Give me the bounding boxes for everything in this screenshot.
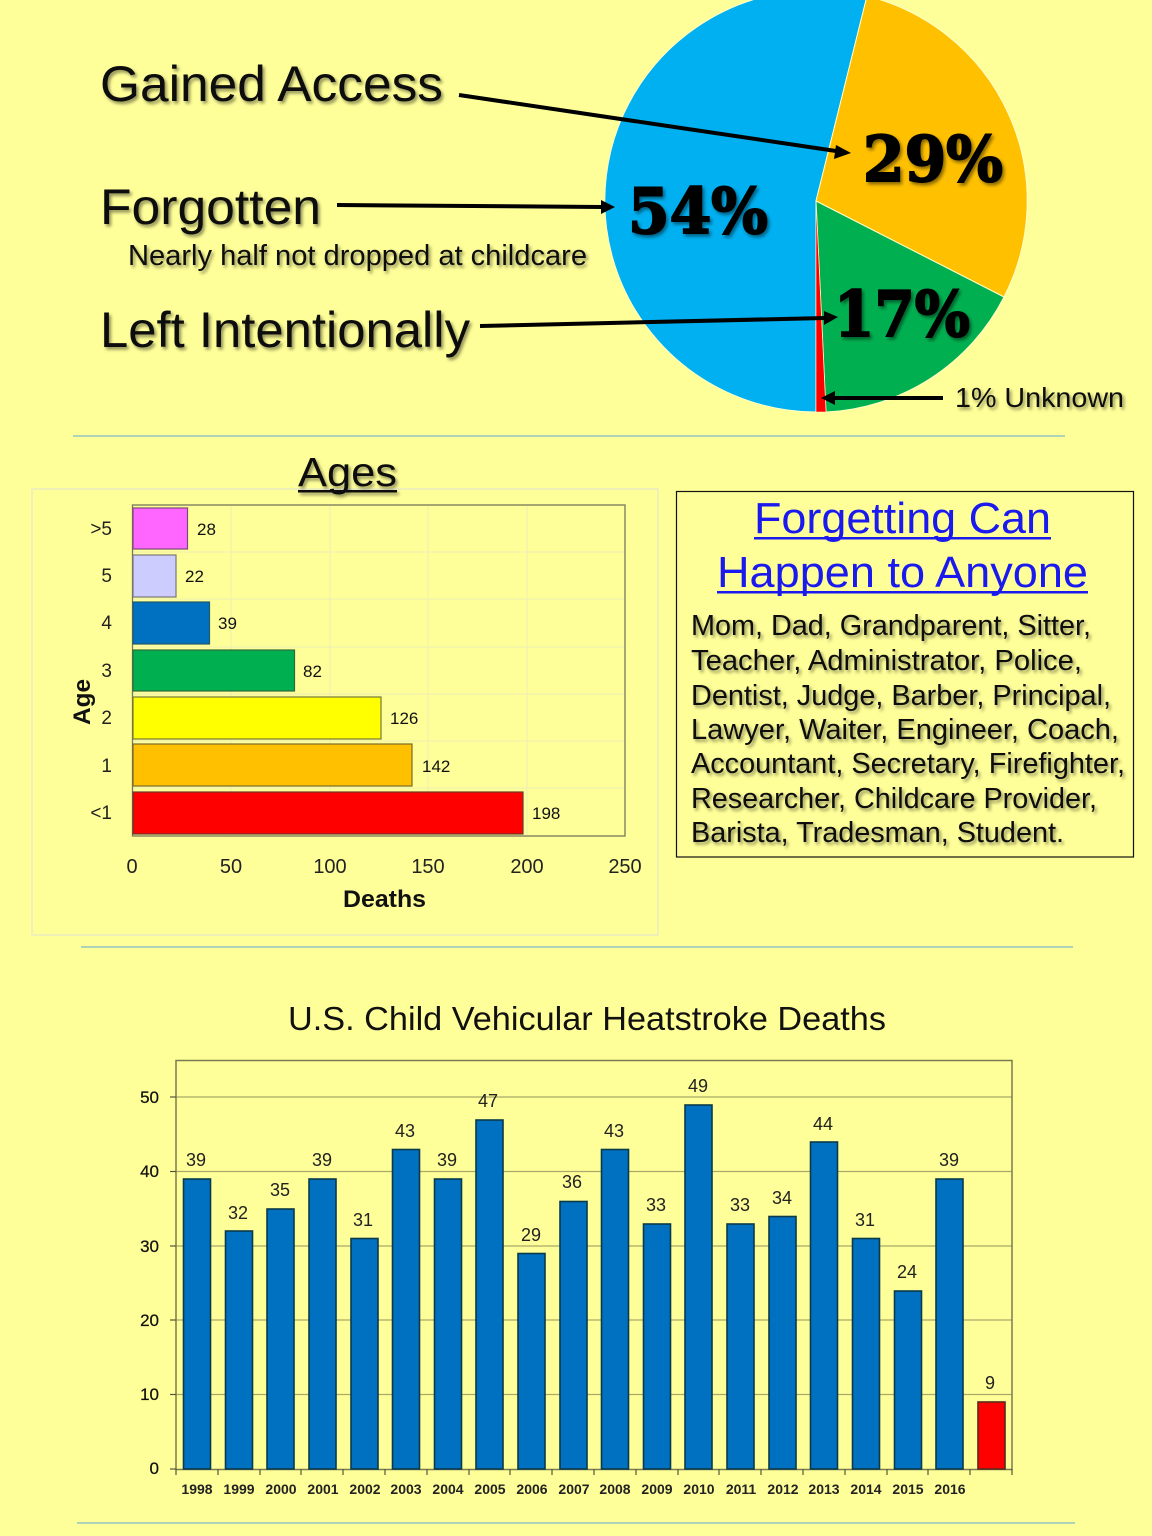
x axis year labels: 2003 (390, 1481, 422, 1497)
panel: forgetting can happen to anyone (676, 492, 1134, 857)
yearly value labels: 36 (562, 1172, 582, 1192)
yearly value labels: 43 (395, 1121, 415, 1141)
pie slice: unknown 1% (816, 201, 826, 412)
bar value labels: 82 (303, 662, 322, 681)
panel body text: list of people: Teacher, Administrator, Police, (691, 645, 1082, 677)
age axis labels: 4 (101, 613, 112, 634)
label: Left Intentionally: Left Intentionally (100, 302, 470, 358)
x axis year labels: 2005 (474, 1481, 506, 1497)
highlighted partial-year bar (978, 1402, 1005, 1469)
yearly value labels: 32 (228, 1203, 248, 1223)
arrow: Forgotten to 54% (337, 200, 615, 214)
panel body text: list of people: Researcher, Childcare Provider, (691, 783, 1097, 815)
bar value labels: 126 (390, 709, 418, 728)
chart title: U.S. Child Vehicular Heatstroke Deaths (288, 1000, 886, 1037)
axis title: Age: Age (69, 679, 96, 725)
deaths axis labels: 100 (313, 856, 347, 878)
panel body text: list of people: Lawyer, Waiter, Engineer, Coach, (691, 714, 1119, 746)
x axis year labels: 2012 (767, 1481, 799, 1497)
x axis year labels: 2016 (934, 1481, 966, 1497)
yearly value labels: 24 (897, 1262, 917, 1282)
y axis labels: 20 (140, 1311, 159, 1330)
panel body text: list of people: Accountant, Secretary, Firefighter, (691, 748, 1125, 780)
bar value labels: 22 (185, 567, 204, 586)
arrow: Left Intentionally to 17% (480, 311, 838, 326)
x axis year labels: 2011 (726, 1481, 756, 1497)
x axis year labels: 2014 (850, 1481, 882, 1497)
deaths axis labels: 0 (126, 856, 138, 878)
panel body text: list of people: Barista, Tradesman, Student. (691, 817, 1064, 849)
x axis year labels: 2009 (641, 1481, 673, 1497)
label: Forgotten: Forgotten (100, 179, 321, 235)
y axis labels: 0 (150, 1459, 159, 1478)
age axis labels: 2 (101, 708, 112, 729)
x axis year labels: 1999 (223, 1481, 255, 1497)
note: nearly half not dropped at childcare: Nearly half not dropped at childcare (128, 240, 587, 272)
yearly bars (184, 1105, 1005, 1469)
deaths axis labels: 50 (220, 856, 242, 878)
yearly value labels: 43 (604, 1121, 624, 1141)
x axis year labels: 2015 (892, 1481, 924, 1497)
x axis year labels: 2000 (265, 1481, 297, 1497)
panel: ages bar chart (32, 489, 658, 935)
yearly value labels: 29 (521, 1225, 541, 1245)
yearly value labels: 33 (646, 1195, 666, 1215)
panel heading: Happen to Anyone (717, 548, 1088, 597)
yearly value labels: 39 (186, 1150, 206, 1170)
yearly value labels: 33 (730, 1195, 750, 1215)
age axis labels (90, 519, 112, 824)
percent label: 54%: 54% (628, 174, 768, 248)
panel body text: list of people: Dentist, Judge, Barber, Principal, (691, 680, 1111, 712)
x axis year labels: 2006 (516, 1481, 548, 1497)
yearly value labels: 47 (478, 1091, 498, 1111)
x axis year labels (181, 1481, 966, 1497)
deaths axis labels: 250 (608, 856, 642, 878)
x axis year labels: 2004 (432, 1481, 464, 1497)
deaths axis labels: 200 (510, 856, 544, 878)
axis title: Deaths: Deaths (343, 886, 426, 913)
percent label: 17%: 17% (834, 277, 970, 351)
age axis labels: 1 (101, 756, 112, 777)
x axis year labels: 2001 (307, 1481, 339, 1497)
arrow: Gained Access to 29% (459, 95, 851, 159)
x axis year labels: 2007 (558, 1481, 590, 1497)
panel heading: Forgetting Can (754, 494, 1051, 543)
annual deaths bar chart (140, 1060, 1012, 1497)
yearly value labels: 39 (437, 1150, 457, 1170)
bar value labels: 28 (197, 520, 216, 539)
yearly value labels: 39 (939, 1150, 959, 1170)
yearly value labels (186, 1076, 995, 1393)
bar value labels: 198 (532, 804, 560, 823)
yearly value labels: 35 (270, 1180, 290, 1200)
panel body text: list of people (691, 610, 1125, 849)
panel body text: list of people: Mom, Dad, Grandparent, Sitter, (691, 610, 1091, 642)
y axis labels: 50 (140, 1088, 159, 1107)
y axis labels: 10 (140, 1385, 159, 1404)
panel heading (717, 494, 1088, 597)
yearly value labels: 31 (855, 1210, 875, 1230)
bar value labels: 39 (218, 614, 237, 633)
bar value labels (185, 520, 560, 823)
yearly value labels: 49 (688, 1076, 708, 1096)
y axis labels: 40 (140, 1162, 159, 1181)
deaths axis labels: 150 (411, 856, 445, 878)
y axis labels (140, 1088, 159, 1478)
heading: Ages: Ages (298, 449, 397, 495)
x axis year labels: 2008 (599, 1481, 631, 1497)
x axis year labels: 2002 (349, 1481, 381, 1497)
label: 1% Unknown: 1% Unknown (955, 382, 1124, 413)
yearly value labels: 44 (813, 1114, 833, 1134)
age axis labels: 5 (101, 566, 112, 587)
age axis labels: <1 (90, 803, 112, 824)
yearly value labels: 9 (985, 1373, 995, 1393)
y axis labels: 30 (140, 1237, 159, 1256)
deaths axis labels (126, 856, 642, 878)
age axis labels: 3 (101, 661, 112, 682)
pie slice: left intentionally 17% (816, 201, 1004, 412)
yearly value labels: 39 (312, 1150, 332, 1170)
percent label: 29%: 29% (863, 122, 1003, 196)
x axis year labels: 2010 (683, 1481, 715, 1497)
yearly value labels: 34 (772, 1188, 792, 1208)
label: Gained Access: Gained Access (100, 56, 443, 112)
bar value labels: 142 (422, 757, 450, 776)
x axis year labels: 2013 (808, 1481, 840, 1497)
yearly value labels: 31 (353, 1210, 373, 1230)
arrow: 1% Unknown to red slice (821, 391, 943, 405)
age axis labels: >5 (90, 519, 112, 540)
x axis year labels: 1998 (181, 1481, 213, 1497)
pie chart: how children gained entry (605, 0, 1027, 412)
pie slice: forgotten 54% (605, 0, 867, 412)
age bars (133, 508, 523, 834)
pie slice: gained access 29% (816, 0, 1027, 297)
